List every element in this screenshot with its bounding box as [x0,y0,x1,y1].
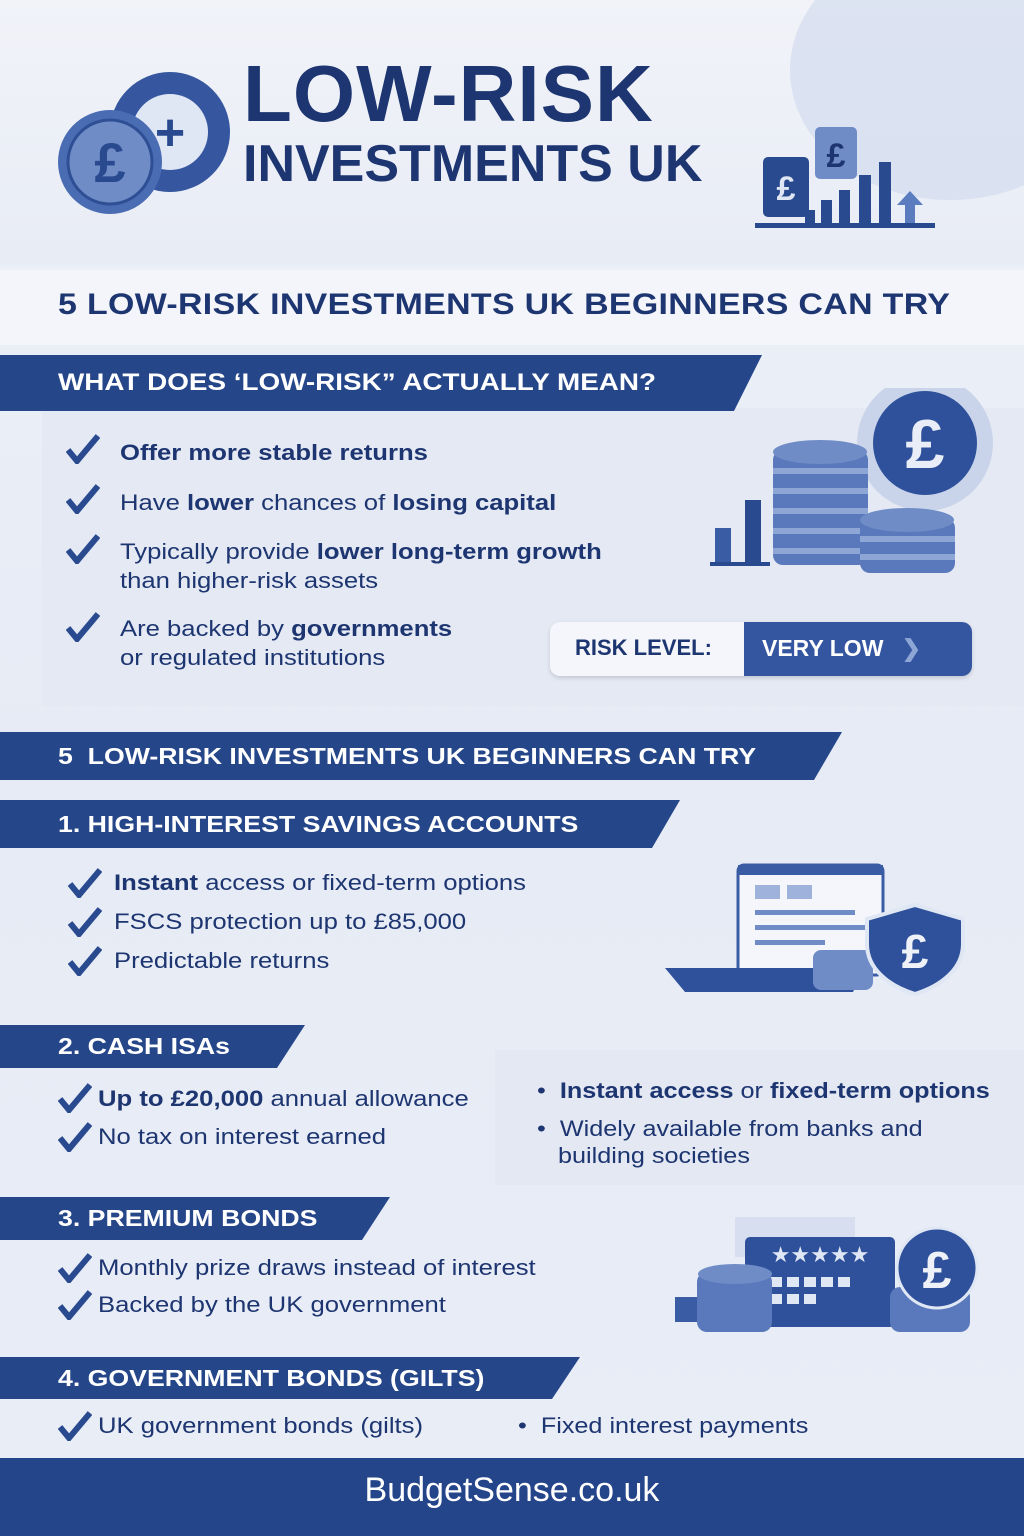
panel: ISA extras: • Widely available from banks and [537,1116,923,1141]
icon: pound chart [755,127,935,228]
section 3: premium bonds [0,1197,978,1332]
icon: pound chart: £ [777,170,796,208]
list: low-risk meaning: Have lower chances of losing capital [120,490,556,515]
section 4: gilts: UK government bonds (gilts) [98,1413,423,1438]
text: 5 LOW-RISK INVESTMENTS UK BEGINNERS CAN TRY [58,288,950,321]
band: section 4: 4. GOVERNMENT BONDS (GILTS) [58,1364,484,1390]
risk level badge: VERY LOW ❯ [762,635,921,661]
icon: pound coins: + [155,104,185,162]
icon: pound chart: £ [827,137,846,175]
section 2: cash ISAs [0,1025,990,1168]
icon: coin stacks [710,388,993,573]
band: section 1 [0,800,680,848]
section 4: gilts: • Fixed interest payments [518,1413,808,1438]
list: low-risk meaning: or regulated institutions [120,645,385,670]
section 3: premium bonds: Monthly prize draws instead of interest [98,1255,536,1280]
icon: premium bond tickets and coins [675,1217,978,1332]
risk level badge [550,622,972,676]
panel: what low-risk means [42,408,1024,706]
section 1: savings accounts: Predictable returns [114,948,329,973]
band: section 3: 3. PREMIUM BONDS [58,1205,317,1231]
panel: ISA extras [495,1050,1024,1185]
band: what does low-risk mean [0,355,762,411]
icon: laptop shield: £ [902,926,929,979]
footer [0,1458,1024,1536]
band: what does low-risk mean: WHAT DOES ‘LOW-RISK” ACTUALLY MEAN? [58,369,656,396]
panel: ISA extras: • Instant access or fixed-term options [537,1078,990,1103]
icon: coin stacks: £ [906,405,945,483]
section 1: savings accounts [0,800,961,992]
title [243,49,702,193]
section 1: savings accounts: FSCS protection up to £85,000 [114,909,466,934]
section 3: premium bonds: Backed by the UK government [98,1292,446,1317]
band: section 1: 1. HIGH-INTEREST SAVINGS ACCOUNTS [58,810,578,836]
risk level badge: RISK LEVEL: [575,635,712,660]
band: section 2: 2. CASH ISAs [58,1033,230,1059]
icon: laptop shield [665,864,961,992]
title: INVESTMENTS UK [243,135,702,193]
list: low-risk meaning: Are backed by governments [120,616,452,641]
footer: BudgetSense.co.uk [365,1471,659,1509]
list: low-risk meaning: Typically provide lower long-term growth [120,539,602,564]
list: low-risk meaning: Offer more stable returns [120,440,428,465]
list: low-risk meaning [66,434,602,670]
section 1: savings accounts: Instant access or fixed-term options [114,870,526,895]
section 2: cash ISAs: No tax on interest earned [98,1124,386,1149]
list: low-risk meaning: than higher-risk assets [120,568,378,593]
band: 5 investments: 5 LOW-RISK INVESTMENTS UK BEGINNERS CAN TRY [58,742,756,768]
icon: pound coins [58,72,230,214]
icon: premium bond tickets and coins: ★★★★★ [771,1243,869,1268]
panel: ISA extras: building societies [558,1143,750,1168]
title: LOW-RISK [243,49,654,138]
band: section 3 [0,1197,390,1240]
band: section 4 [0,1357,580,1399]
header background [0,0,1024,265]
subtitle [0,270,1024,345]
band: section 2 [0,1025,305,1068]
icon: premium bond tickets and coins: £ [923,1242,952,1300]
icon: pound coins: £ [94,131,126,194]
section 4: gilts [0,1357,808,1441]
section 2: cash ISAs: Up to £20,000 annual allowance [98,1086,469,1111]
band: 5 investments [0,732,842,780]
